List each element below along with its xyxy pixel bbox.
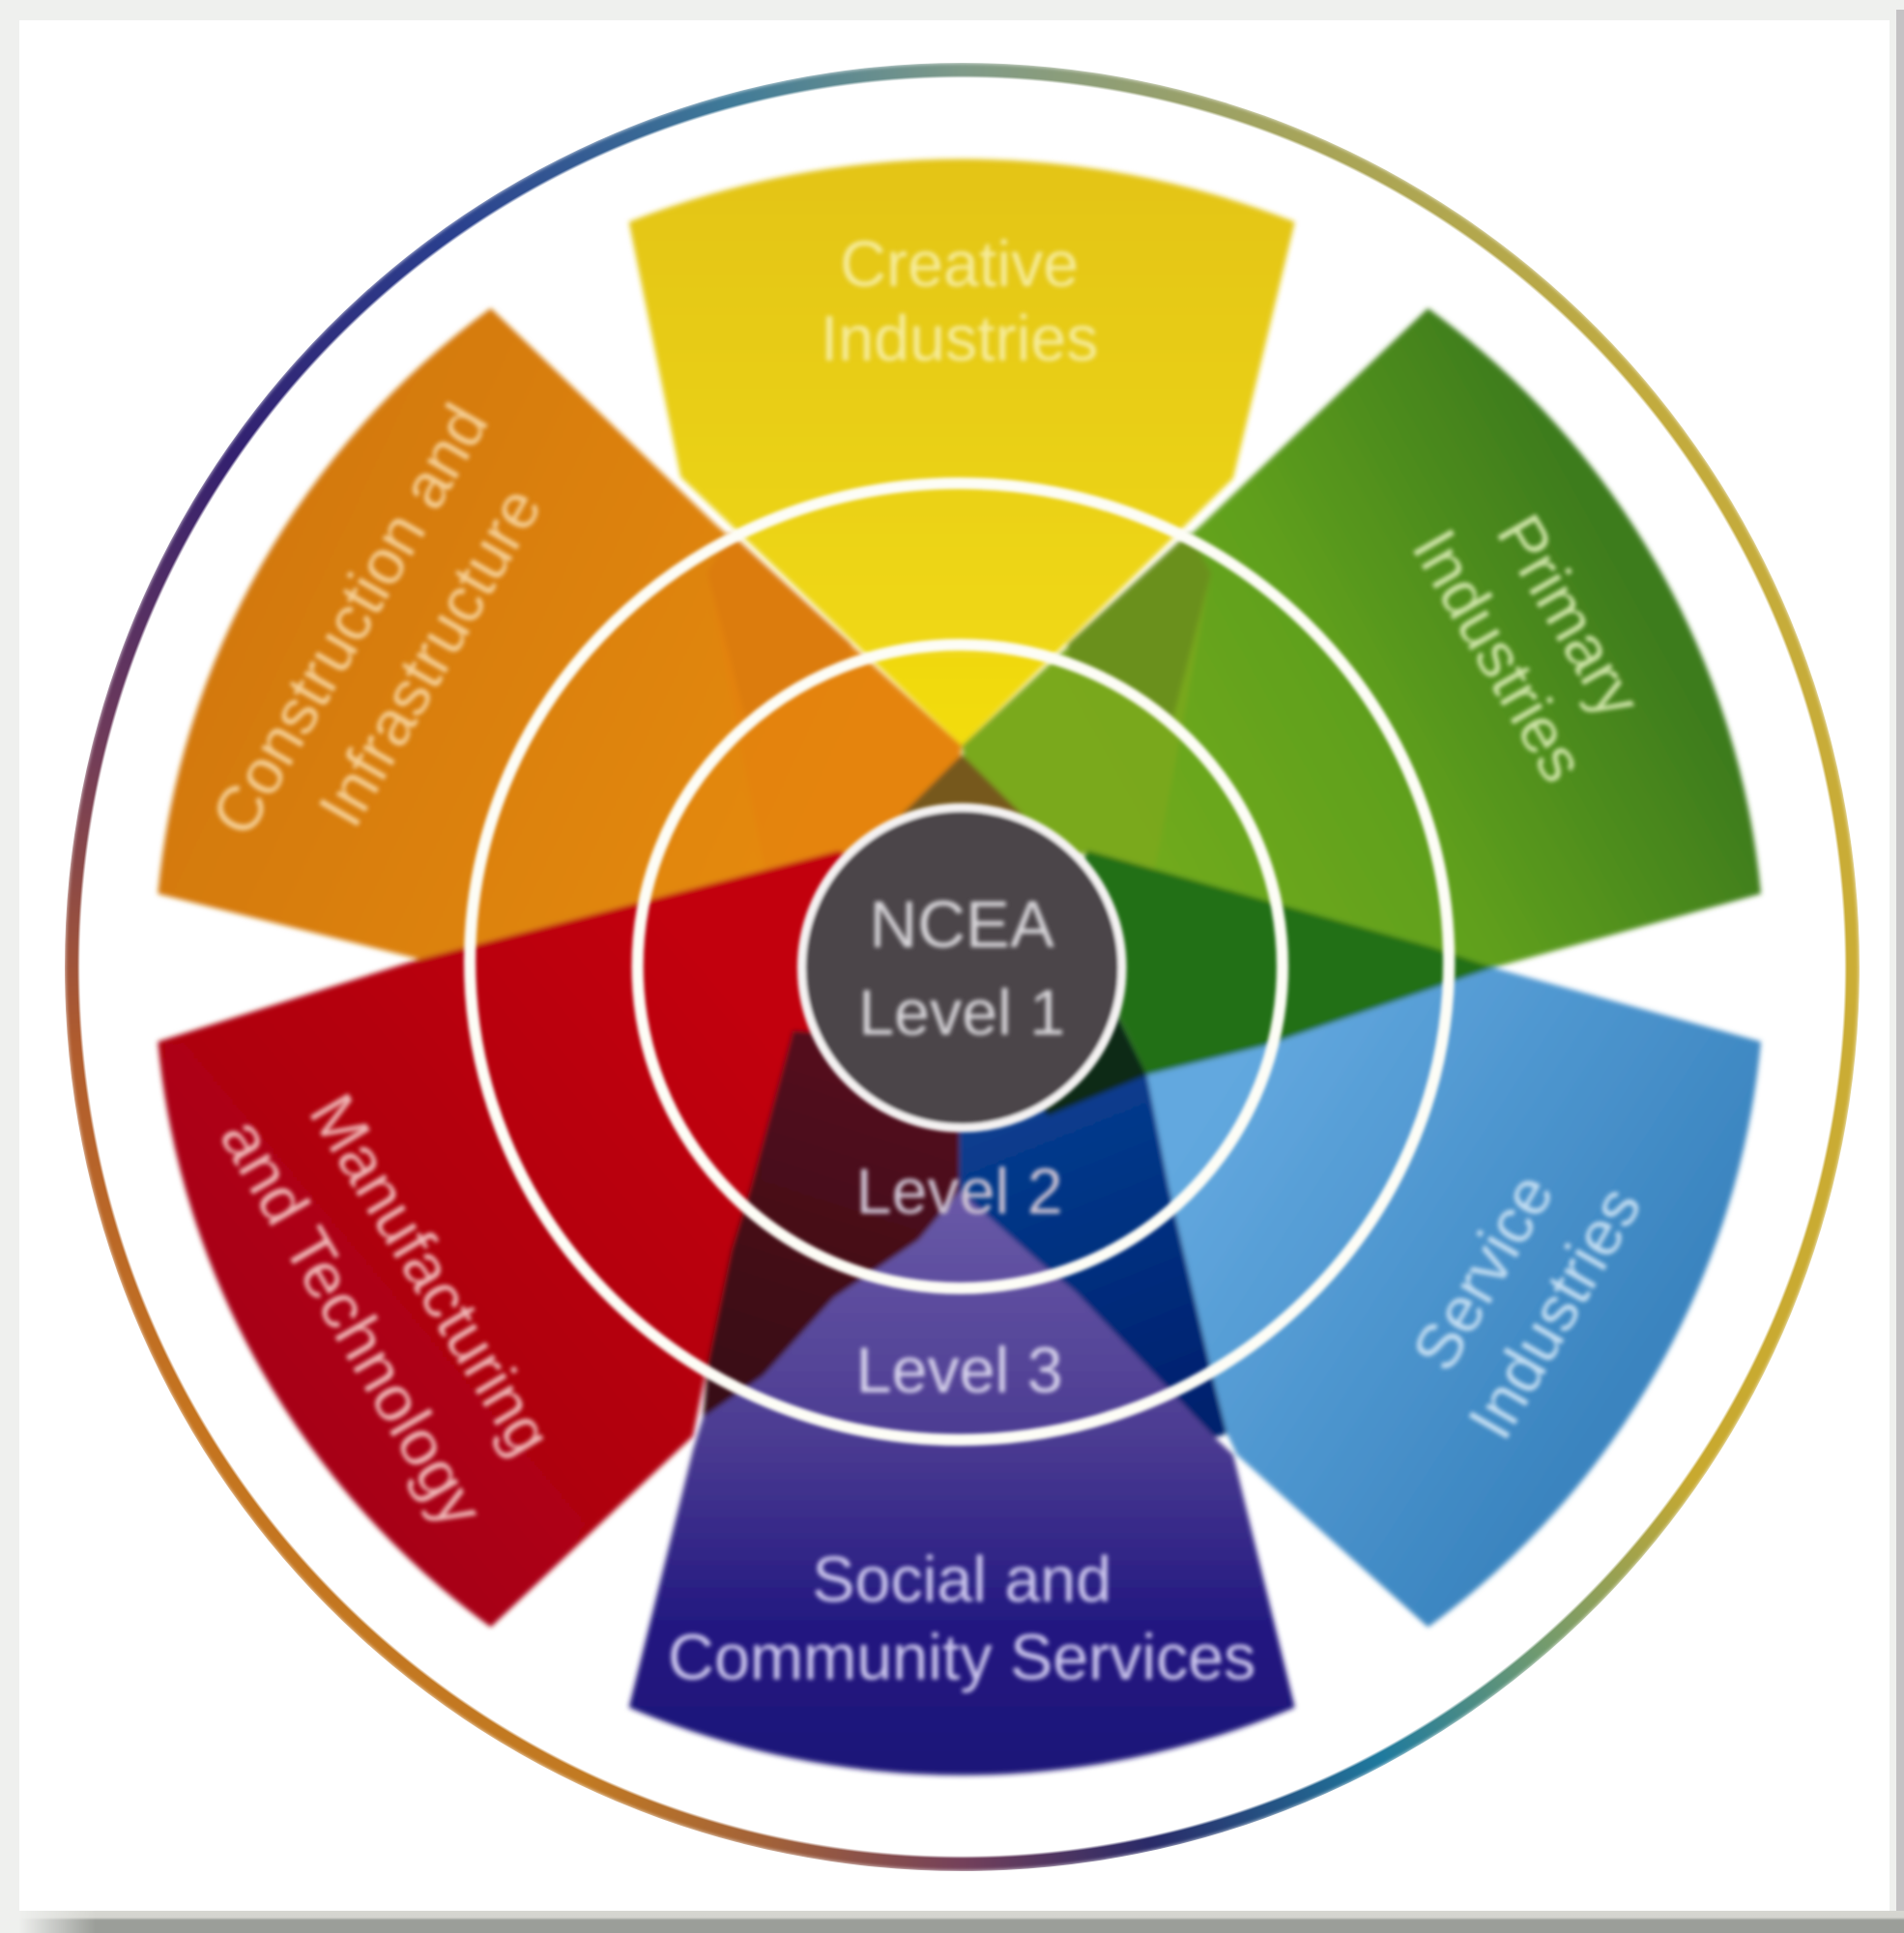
level ring 2 — [638, 645, 1283, 1288]
overlap: olive inner facet — [962, 533, 1211, 887]
overlap: orange inner facet — [707, 533, 962, 887]
segment: Creative Industries — [629, 159, 1295, 746]
label: Primary Industries: Industries — [1398, 518, 1599, 794]
overlap: brown apex — [900, 755, 1024, 816]
labels — [198, 229, 1656, 1694]
overlap: navy — [960, 1075, 1227, 1437]
label: Social and Community Services: Community Services — [668, 1623, 1255, 1694]
overlap: dark green — [1024, 851, 1493, 1075]
label: Social and Community Services — [668, 1544, 1255, 1694]
segment: Primary Industries — [962, 308, 1761, 967]
label: Creative Industries: Industries — [821, 303, 1098, 375]
label: Social and Community Services: Social and — [812, 1544, 1111, 1616]
overlap: maroon — [703, 1030, 960, 1418]
overlap: orange band facet — [707, 533, 851, 724]
label: Primary Industries: Primary — [1483, 503, 1656, 731]
bottom drop shadow — [0, 1911, 1904, 1933]
label: Construction and Infrastructure: Construction and — [198, 392, 503, 848]
segment: Social and Community Services — [629, 1191, 1295, 1775]
segment: Manufacturing and Technology — [158, 851, 938, 1628]
label: NCEA Level 1: Level 1 — [858, 977, 1065, 1049]
segment: Service Industries — [1147, 967, 1761, 1628]
centre circle — [801, 807, 1122, 1128]
label: Creative Industries — [821, 229, 1098, 375]
dark shade near centre — [987, 974, 1147, 1115]
label: Level 2: Level 2 — [856, 1156, 1063, 1227]
label: Construction and Infrastructure: Infrastructure — [305, 476, 556, 839]
segment: Construction and Infrastructure — [158, 308, 962, 959]
right edge shadow — [1896, 10, 1904, 1933]
label: Level 3: Level 3 — [856, 1335, 1063, 1406]
label: Manufacturing and Technology: and Technology — [206, 1107, 498, 1540]
label: NCEA Level 1 — [858, 887, 1065, 1049]
label: Service Industries: Service — [1399, 1162, 1568, 1383]
overlap: olive band facet — [1068, 533, 1211, 724]
label: NCEA Level 1: NCEA — [870, 887, 1054, 962]
label: Service Industries: Industries — [1455, 1174, 1656, 1451]
label: Manufacturing and Technology: Manufacturing — [295, 1082, 565, 1467]
level ring 3 — [470, 483, 1449, 1440]
label: Creative Industries: Creative — [840, 229, 1079, 301]
